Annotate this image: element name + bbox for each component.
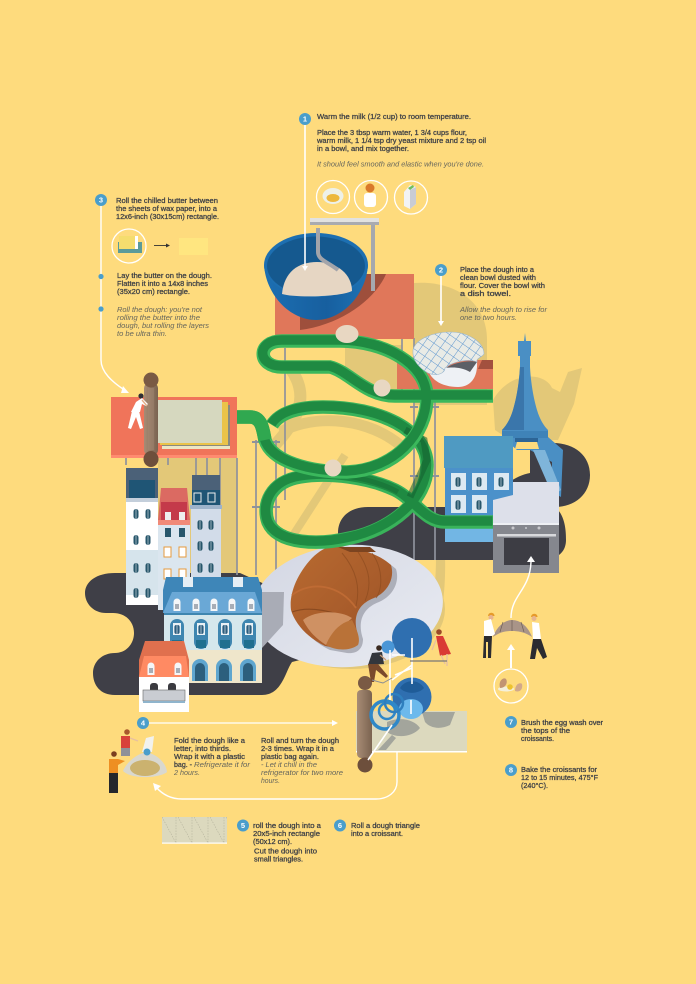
step 2: clean bowl dusted with bbox=[460, 273, 536, 282]
oven bbox=[493, 482, 559, 573]
dough cutting diagram bbox=[162, 817, 227, 844]
dark ground blobs bbox=[85, 443, 590, 695]
step 4: refrigerator for two more bbox=[261, 768, 343, 777]
step 3: Lay the butter on the dough. bbox=[117, 271, 212, 280]
step 4: Refrigerate it for bbox=[194, 760, 251, 769]
small orange roof house bbox=[139, 641, 189, 712]
step 7: the tops of the bbox=[521, 726, 570, 735]
butter icon and arrow bbox=[112, 229, 208, 263]
step 4: letter, into thirds. bbox=[174, 744, 231, 753]
step 3: dough, but rolling the layers bbox=[117, 321, 209, 330]
step 3: (35x20 cm) rectangle. bbox=[117, 287, 190, 296]
dough balls on track bbox=[324, 325, 390, 476]
ingredient icons bbox=[316, 180, 428, 214]
step 6: into a croissant. bbox=[351, 829, 403, 838]
step 4: 2-3 times. Wrap it in a bbox=[261, 744, 335, 753]
step 8: Bake the croissants for bbox=[521, 765, 598, 774]
step 2: flour. Cover the bowl with bbox=[460, 281, 545, 290]
step 4: hours. bbox=[261, 776, 280, 785]
dough bag with two people bbox=[109, 729, 167, 793]
step 1: It should feel smooth and elastic when you're done. bbox=[317, 160, 484, 168]
step 3: Roll the chilled butter between bbox=[116, 196, 218, 205]
eiffel tower bbox=[502, 333, 563, 497]
step 5: small triangles. bbox=[254, 854, 303, 864]
step 4 bbox=[137, 717, 343, 785]
blue grey building bbox=[190, 475, 222, 577]
step 4: plastic bag again. bbox=[261, 752, 319, 761]
dough sheet bbox=[158, 400, 222, 443]
step 3: 3 bbox=[99, 196, 103, 205]
step 8 bbox=[505, 764, 599, 790]
step 3 bbox=[95, 194, 219, 393]
chefs carrying croissant bbox=[483, 613, 547, 659]
grand blue roof building bbox=[163, 577, 262, 683]
step 3: Flatten it into a 14x8 inches bbox=[117, 279, 208, 288]
step 3: to be ultra thin. bbox=[117, 329, 167, 338]
step 7: croissants. bbox=[521, 734, 554, 743]
bike rider dark shirt bbox=[368, 645, 392, 683]
step 1: 1 bbox=[303, 115, 307, 124]
orange shelf bbox=[397, 360, 493, 389]
dough rolling pin bbox=[357, 676, 372, 772]
step 4: Wrap it with a plastic bbox=[174, 752, 245, 761]
mixer stand bbox=[310, 218, 379, 291]
eiffel tower and right blue building bbox=[444, 333, 563, 542]
step 2 bbox=[435, 264, 548, 326]
step 3: Roll the dough: you're not bbox=[117, 305, 203, 314]
croissant bbox=[291, 546, 397, 653]
step 4: 4 bbox=[141, 719, 146, 728]
step 5: 20x5-inch rectangle bbox=[253, 829, 320, 838]
step 5: 5 bbox=[241, 821, 245, 830]
red roof building bbox=[158, 488, 190, 610]
step 4: Fold the dough like a bbox=[174, 736, 246, 745]
front spiral bbox=[237, 340, 493, 472]
big blue bowl with dough bbox=[264, 228, 368, 320]
step 8: 12 to 15 minutes, 475°F bbox=[521, 773, 599, 782]
step 6: 6 bbox=[338, 821, 342, 830]
arrow from sheet back to step 4 bbox=[153, 752, 397, 799]
left table bbox=[111, 372, 237, 467]
gears and bicycles machine bbox=[356, 618, 467, 772]
step 3: the sheets of wax paper, into a bbox=[116, 204, 218, 213]
step 4: - Let it chill in the bbox=[261, 760, 317, 769]
egg wash icon and arrows bbox=[494, 556, 535, 703]
step 2: 2 bbox=[439, 266, 443, 275]
green track bbox=[237, 325, 493, 542]
step 7: 7 bbox=[509, 718, 513, 727]
step 5: roll the dough into a bbox=[253, 821, 322, 830]
step 6: Roll a dough triangle bbox=[351, 821, 420, 830]
person pushing pin bbox=[128, 393, 148, 429]
step 1: in a bowl, and mix together. bbox=[317, 144, 409, 153]
upper orange table bbox=[275, 274, 414, 339]
step 8: (240°C). bbox=[521, 781, 548, 790]
step 2: Place the dough into a bbox=[460, 265, 535, 274]
step 1 bbox=[299, 112, 486, 271]
back spiral bbox=[266, 406, 493, 542]
step 3: rolling the butter into the bbox=[117, 313, 200, 322]
step 4: Roll and turn the dough bbox=[261, 736, 339, 745]
step 5: (50x12 cm). bbox=[253, 837, 292, 846]
gear wheels bbox=[368, 618, 432, 760]
step 4: bag. - bbox=[174, 760, 193, 769]
step 1: Place the 3 tbsp warm water, 1 3/4 cups flour, bbox=[317, 128, 467, 137]
step 2: Allow the dough to rise for bbox=[459, 305, 548, 314]
covered bowl bbox=[413, 332, 484, 387]
step 7: Brush the egg wash over bbox=[521, 718, 604, 727]
step 6 bbox=[334, 820, 420, 838]
step 2: one to two hours. bbox=[460, 313, 517, 322]
step 2: a dish towel. bbox=[460, 289, 511, 298]
step 8: 8 bbox=[509, 766, 513, 775]
poles bbox=[126, 338, 439, 575]
step 1: Warm the milk (1/2 cup) to room temperature. bbox=[317, 112, 471, 121]
rolling pin bbox=[144, 372, 158, 467]
bike rider red dress bbox=[410, 629, 451, 666]
cast shadows bbox=[158, 283, 582, 640]
step 5 bbox=[162, 817, 322, 864]
left buildings cluster bbox=[126, 468, 262, 712]
step 1: warm milk, 1 1/4 tsp dry yeast mixture and 2 tsp oil bbox=[316, 136, 486, 145]
step 7 bbox=[505, 716, 604, 743]
tall white building bbox=[126, 468, 158, 605]
step 4: 2 hours. bbox=[173, 768, 200, 777]
step 5: Cut the dough into bbox=[254, 846, 317, 856]
plate with croissant bbox=[249, 539, 447, 673]
bowl shadow on table bbox=[300, 274, 386, 330]
step 3: 12x6-inch (30x15cm) rectangle. bbox=[116, 212, 219, 221]
